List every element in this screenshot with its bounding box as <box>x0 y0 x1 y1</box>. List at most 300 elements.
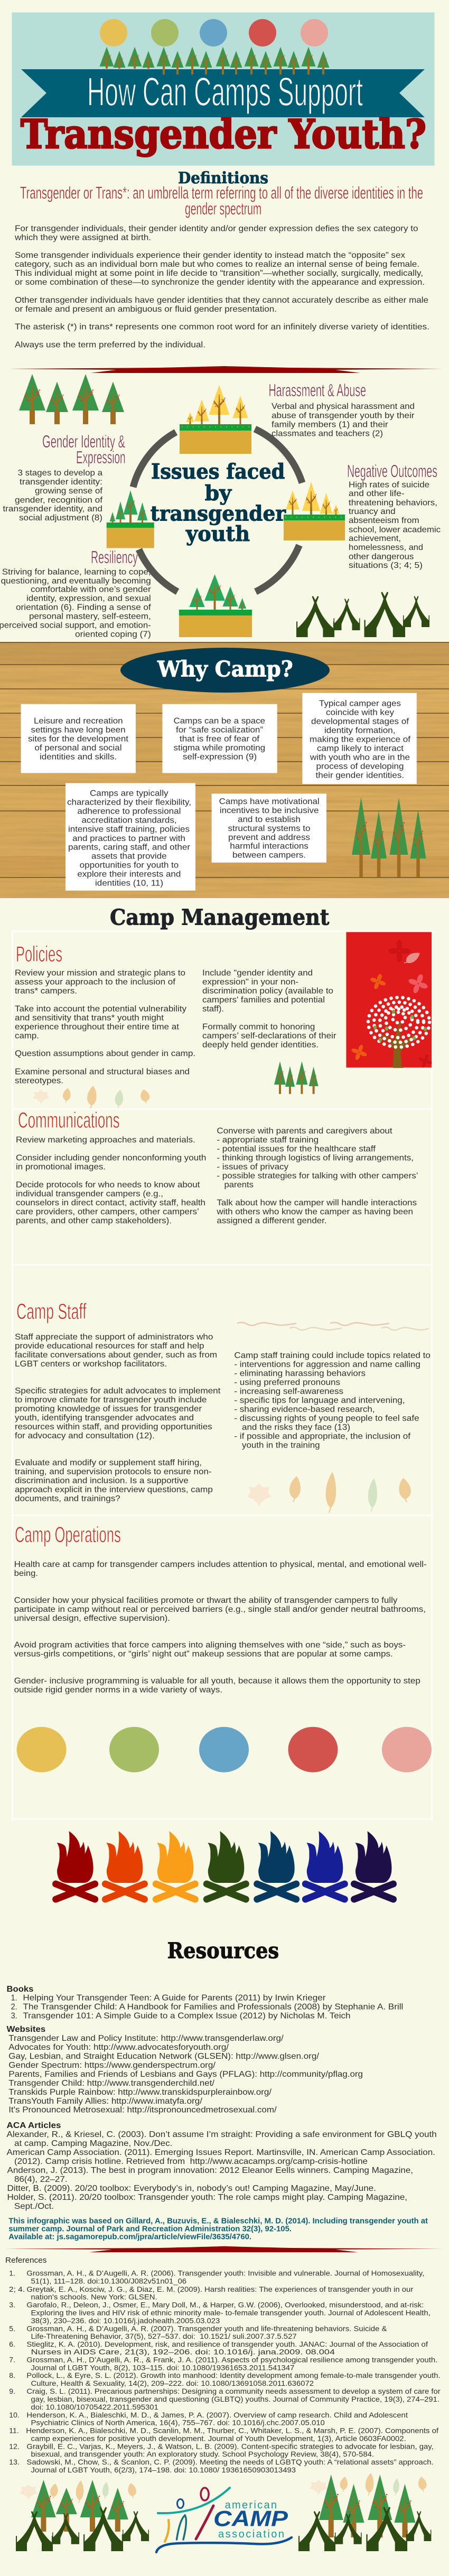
divider swoosh <box>5 2246 443 2252</box>
panel: references <box>5 2256 441 2474</box>
coloured circles <box>100 19 328 46</box>
reference list: Graybill, E. C., Varjas, K., Meyers, J., & Watson, L. B. (2009). Content-specific strategies to advocate for lesbian, gay, <box>26 2442 434 2450</box>
card: leisure and recreation: Leisure and recreation <box>34 716 123 725</box>
books list: 1. <box>11 1994 17 2003</box>
policies left column: camp. <box>15 1031 39 1040</box>
policies right column: staff). <box>202 1005 224 1014</box>
resiliency text: identity, expression, and sexual <box>26 594 151 603</box>
websites list: It's Pronounced Metrosexual: http://itspronouncedmetrosexual.com/ <box>8 2106 277 2115</box>
trees <box>319 2475 415 2537</box>
reference list: Garofalo, R., Deleon, J., Osmer, E., Mary Doll, M., & Harper, G.W. (2006), Overlooked, misunderstood, and at-risk: <box>26 2300 424 2309</box>
resiliency text: perceived social support, and emotion- <box>0 621 151 630</box>
camp operations text: Avoid program activities that force campers into aligning themselves with one “side,” such as boys- <box>14 1641 406 1650</box>
camp staff left column: Staff appreciate the support of administrators who <box>15 1333 213 1342</box>
card: safe socialization: stigma while promoting <box>173 743 265 752</box>
negative outcomes text: other dangerous <box>349 553 414 562</box>
negative outcomes text <box>349 481 441 570</box>
reference list: doi: 10.1080/10705422.2011.595301 <box>31 2403 158 2411</box>
communications right column: Talk about how the camper will handle interactions <box>217 1199 417 1208</box>
resiliency text: orientation (6). Finding a sense of <box>16 603 151 612</box>
negative outcomes text: absenteeism from <box>349 516 419 525</box>
card: camps are typically: intensive staff training, policies <box>68 825 190 834</box>
camp operations text: Consider how your physical facilities promote or thwart the ability of transgender campers to fully <box>14 1596 397 1605</box>
reference list: Henderson, K. A., Bialeschki, M. D., & James, P. A. (2007). Overview of camp research. Child and Adolescent <box>26 2411 408 2419</box>
communications left column: Decide protocols for who needs to know about <box>16 1181 200 1190</box>
camp staff left column: discrimination and inclusion. Is a supportive <box>15 1476 189 1485</box>
card: leisure and recreation: of personal and social <box>35 743 121 752</box>
websites list: Websites <box>6 2025 45 2034</box>
reference list: 38(3), 230–236. doi: 10.1016/j.jadohealth.2005.03.023 <box>31 2316 220 2325</box>
card: camps are typically: opportunities for youth to <box>80 861 179 870</box>
icon: tents <box>296 592 429 637</box>
communications right column: parents <box>224 1181 254 1190</box>
camp staff right column: - eliminating harassing behaviors <box>234 1369 366 1378</box>
reference list: Nurses in AIDS Care, 21(3), 192–206. doi: 10.1016/j. jana.2009. 08.004 <box>31 2348 335 2356</box>
policies right column: campers’ self-declarations of their <box>202 1031 336 1040</box>
top island with autumn trees <box>180 385 251 454</box>
header background <box>12 13 434 166</box>
communications left column: Review marketing approaches and materials. <box>16 1136 195 1145</box>
books list: 2. <box>11 2003 17 2012</box>
card: camps are typically: accreditation standards, <box>81 816 176 825</box>
harassment text <box>272 402 415 438</box>
card: leisure and recreation: identities and skills. <box>40 752 117 761</box>
websites list: Gay, Lesbian, and Straight Education Network (GLSEN): http://www.glsen.org/ <box>8 2052 320 2061</box>
harassment text: abuse of transgender youth by their <box>272 411 415 420</box>
card: typical camper ages: their gender identities. <box>316 771 404 780</box>
camp staff right column <box>234 1351 431 1450</box>
reference list: bisexual, and transgender youth: An exploratory study. School Psychology Review, 38(4), 570-584. <box>31 2450 374 2458</box>
policies right column: deeply held gender identities. <box>202 1040 319 1049</box>
heading: gender identity and expression: Gender Identity & <box>42 432 125 451</box>
transgender definition: gender spectrum <box>185 199 261 218</box>
reference list: Psychiatric Clinics of North America, 16(4), 755–767. doi: 10.1016/j.chc.2007.05.010 <box>31 2419 325 2427</box>
reference list: Grossman, A. H., D’Augelli, A. R., & Frank, J. A. (2011). Aspects of psychological resilience among transgender youth. <box>26 2356 437 2364</box>
ACA articles list: Alexander, R., & Kriesel, C. (2003). Don’t assume I’m straight: Providing a safe environment for GBLQ youth <box>6 2130 437 2139</box>
source note: This infographic was based on Gillard, A., Buzuvis, E., & Bialeschki, M. D. (2014). Including transgender youth at <box>8 2216 428 2225</box>
camp management frame <box>11 931 434 1822</box>
communications left column: individual transgender campers (e.g., <box>16 1190 163 1199</box>
communications right column <box>216 1127 418 1226</box>
panel: resources <box>6 1938 437 2241</box>
camp staff left column: to improve climate for transgender youth include <box>15 1395 207 1404</box>
camp staff right column: and the risks they face (13) <box>242 1423 350 1432</box>
ACA articles list: Sept./Oct. <box>14 2202 54 2211</box>
negative outcomes text: homelessness, and <box>349 543 423 552</box>
card: leisure and recreation: sites for the development <box>28 734 129 743</box>
leaves <box>309 2473 427 2496</box>
reference list: gay, lesbian, bisexual, transgender and questioning (GLBTQ) youths. Journal of Community Practice, 19(3), 274–291. <box>31 2395 439 2403</box>
camp staff left column <box>15 1333 221 1503</box>
heading: camp operations: Camp Operations <box>15 1522 121 1547</box>
camp staff right column: - using preferred pronouns <box>234 1378 340 1387</box>
negative outcomes text: situations (3; 4; 5) <box>349 561 423 570</box>
camp staff left column: Evaluate and modify or supplement staff hiring, <box>15 1458 202 1467</box>
heading: camp management: Camp Management <box>110 905 329 930</box>
camp staff left column: documents, and trainings? <box>15 1494 120 1503</box>
websites list: Transkids Purple Rainbow: http://www.transkidspurplerainbow.org/ <box>8 2088 272 2097</box>
heading: resiliency: Resiliency <box>91 547 138 567</box>
left island with green trees <box>107 490 154 548</box>
websites list: Parents, Families and Friends of Lesbians and Gays (PFLAG): http://community/pflag.org <box>8 2070 363 2079</box>
policies left column: Review your mission and strategic plans to <box>15 969 185 978</box>
reference list: 5. <box>9 2324 15 2332</box>
reference list: Exploring the lives and HIV risk of ethnic minority male- to-female transgender youth. Journal of Adolescent Health, <box>31 2308 431 2317</box>
ACA articles list: Holder, S. (2011). 20/20 toolbox: Transgender youth: The role camps might play. Camping Magazine, <box>7 2193 407 2202</box>
logo: american camp association <box>156 2488 292 2552</box>
websites list: Advocates for Youth: http://www.advocatesforyouth.org/ <box>8 2043 229 2052</box>
policies left column: assess your approach to the inclusion of <box>15 978 176 987</box>
card: typical camper ages: identity formation, <box>324 726 395 735</box>
reference list: Sadowski, M., Chow, S., & Scanlon, C. P. (2009). Meeting the needs of LGBTQ youth: A “relational assets” approach. <box>26 2458 434 2466</box>
heading: references: References <box>5 2256 46 2265</box>
camp staff left column: for advocacy and consultation (12). <box>15 1431 155 1440</box>
policies left column: Examine personal and structural biases and <box>15 1067 190 1076</box>
communications left column: Consider including gender nonconforming youth <box>16 1154 206 1163</box>
divider swoosh <box>8 366 443 373</box>
ribbon shape <box>21 69 425 117</box>
policies left column: stereotypes. <box>15 1076 63 1085</box>
centre heading: issues faced by transgender youth: Issues faced <box>151 460 285 484</box>
definitions body text: Some transgender individuals experience their gender identity to instead match the “opposite” sex <box>15 251 405 260</box>
harassment text: Verbal and physical harassment and <box>272 402 415 411</box>
panel: definitions <box>14 169 429 350</box>
card: motivational incentives: structural systems to <box>228 824 311 833</box>
logo text camp: CAMP <box>213 2506 288 2531</box>
ACA articles list: (2012). Camp crisis hotline. Retrieved from http://www.acacamps.org/camp-crisis-hotline <box>14 2157 368 2166</box>
row of pine trees <box>99 47 330 68</box>
books list: Helping Your Transgender Teen: A Guide for Parents (2011) by Irwin Krieger <box>23 1994 326 2003</box>
gender identity text <box>3 469 103 522</box>
camp staff right column: - discussing rights of young people to feel safe <box>234 1414 419 1423</box>
heading: resources: Resources <box>167 1938 279 1964</box>
tents <box>16 2507 149 2551</box>
policies left column: and sensitivity that trans* youth might <box>15 1014 164 1023</box>
camp operations text: participate in camp without real or perceived barriers (e.g., single stall and/or gender neutral bathrooms, <box>14 1605 426 1614</box>
policies left column: trans* campers. <box>15 987 77 996</box>
camp operations text: universal design, effective supervision). <box>14 1614 170 1623</box>
books list: The Transgender Child: A Handbook for Families and Professionals (2008) by Stephanie A. Brill <box>23 2003 403 2012</box>
books list: Transgender 101: A Simple Guide to a Complex Issue (2012) by Nicholas M. Teich <box>23 2012 350 2021</box>
reference list: Stieglitz, K. A. (2010). Development, risk, and resilience of transgender youth. JANAC: Journal of the Association of <box>26 2340 428 2348</box>
right island with autumn trees <box>284 482 345 540</box>
illustration: red panel with white tree <box>346 932 434 1070</box>
camp staff left column: resources within staff, and providing opportunities <box>15 1422 212 1431</box>
camp staff right column: youth in the training <box>242 1441 320 1450</box>
harassment text: classmates and teachers (2) <box>272 430 383 438</box>
communications left column: parents, and other camp stakeholders). <box>16 1217 172 1226</box>
negative outcomes text: and other life- <box>349 489 405 498</box>
reference list: Journal of LGBT Youth, 6(2/3), 174–198. doi: 10.1080/ 19361650903013493 <box>31 2466 296 2474</box>
ACA articles list: American Camp Association. (2011). Emerging Issues Report. Martinsville, IN. American Camp Association. <box>6 2148 435 2157</box>
websites list <box>6 2025 363 2115</box>
negative outcomes text: school, lower academic <box>349 525 441 535</box>
definitions body text: Other transgender individuals have gender identities that they cannot accurately describe as either male <box>15 296 428 305</box>
heading: camp staff: Camp Staff <box>16 1299 87 1324</box>
camp staff right column: - if possible and appropriate, the inclusion of <box>234 1432 411 1441</box>
reference list: Life-Threatening Behavior, 37(5), 527–537. doi: 10.1521/ suli.2007.37.5.527 <box>31 2332 297 2340</box>
policies right column: Include "gender identity and <box>202 969 313 978</box>
footer scene: right trees and tents <box>298 2473 431 2551</box>
icon: row of leaves <box>33 1086 149 1108</box>
wood background <box>0 642 449 898</box>
definitions body text: The asterisk (*) in trans* represents one common root word for an infinitely diverse variety of identities. <box>15 323 429 332</box>
heading ellipse <box>120 648 330 693</box>
books list: 3. <box>11 2012 17 2021</box>
tree trunks over ribbon <box>106 62 324 74</box>
centre heading: issues faced by transgender youth: youth <box>185 522 250 546</box>
communications left column: in promotional images. <box>16 1163 106 1172</box>
communications right column: - possible strategies for talking with other campers’ <box>217 1172 418 1181</box>
card: camps are typically: parents, caring staff, and other <box>68 843 191 852</box>
transgender definition <box>20 183 423 218</box>
reference list: 11. <box>9 2426 19 2435</box>
decorative squiggles <box>237 1322 429 1330</box>
panel: camp operations <box>14 1522 432 1772</box>
heading: gender identity and expression: Expression <box>76 447 126 467</box>
negative outcomes text: threatening behaviors, <box>349 498 437 507</box>
definitions body text: For transgender individuals, their gender identity and/or gender expression defies the sex category to <box>15 224 418 234</box>
policies right column <box>202 969 336 1049</box>
source note: Available at: js.sagamorepub.com/jpra/article/viewFile/3635/4760. <box>8 2232 251 2241</box>
harassment text: family members (1) and their <box>272 421 388 429</box>
reference list: 12. <box>9 2442 20 2450</box>
card: typical camper ages: developmental stages of <box>311 717 409 726</box>
definitions body text <box>14 224 429 350</box>
icon: row of campfires <box>56 1831 394 1899</box>
card: camps are typically: characterized by their flexibility, <box>67 798 191 807</box>
websites list: Transgender Law and Policy Institute: http://www.transgenderlaw.org/ <box>8 2034 284 2043</box>
icon: four pine trees <box>19 374 124 424</box>
communications right column: assigned a different gender. <box>217 1217 326 1226</box>
centre heading: issues faced by transgender youth <box>151 460 286 546</box>
reference list: 3. <box>9 2300 15 2309</box>
definitions body text: or female and present an ambiguous or fluid gender presentation. <box>15 305 277 314</box>
icon: trees on wood <box>352 797 426 877</box>
logo figures <box>156 2488 292 2552</box>
resiliency text: personal mastery, self-esteem, <box>29 612 151 621</box>
card: motivational incentives: between campers. <box>232 851 306 860</box>
reference list: Pollock, L., & Eyre, S. L. (2012). Growth into manhood: Identity development among female-to-male transgender youth. <box>26 2371 441 2379</box>
ACA articles list: Ditter, B. (2009). 20/20 toolbox: Everybody’s in, nobody’s out! Camping Magazine, May/June. <box>7 2184 376 2193</box>
footer scene: left trees and tents <box>16 2480 149 2551</box>
negative outcomes text: achievement, <box>349 534 401 543</box>
communications right column: - potential issues for the healthcare staff <box>217 1145 376 1154</box>
reference list: 10. <box>9 2411 20 2419</box>
ACA articles list: 86(4), 22–27. <box>14 2175 67 2184</box>
websites list: TransYouth Family Allies: http://www.imatyfa.org/ <box>8 2097 203 2106</box>
camp staff left column: Specific strategies for adult advocates to implement <box>15 1386 221 1395</box>
reference list: 9. <box>9 2387 15 2395</box>
card: typical camper ages: Typical camper ages <box>319 699 401 708</box>
camp operations text: outside rigid gender norms in a wide variety of ways. <box>14 1686 222 1695</box>
heading: definitions: Definitions <box>178 169 268 188</box>
camp staff left column: youth, identifying transgender advocates and <box>15 1413 194 1422</box>
communications right column: with others who know the camper as having been <box>216 1208 413 1217</box>
ACA articles list: Anderson, J. (2013). The best in program innovation: 2012 Eleanor Eells winners. Camping Magazine, <box>7 2166 413 2175</box>
definitions body text: or some combination of these—to synchronize the gender identity with the appearance and expression. <box>15 278 425 287</box>
card: camps are typically <box>66 783 195 891</box>
camp staff right column: - increasing self-awareness <box>234 1387 343 1396</box>
camp staff left column: approach explicit in the interview questions, camp <box>15 1485 213 1494</box>
definitions body text: category, such as an individual born male but who comes to realize an internal sense of being female. <box>15 260 419 269</box>
card: motivational incentives: prevent and address <box>228 833 310 842</box>
resiliency text: Striving for balance, learning to cope, <box>2 567 151 577</box>
policies left column: Question assumptions about gender in camp. <box>15 1049 195 1058</box>
reference list: nation's schools. New York: GLSEN. <box>31 2293 157 2301</box>
camp staff right column: Camp staff training could include topics related to <box>234 1351 431 1360</box>
card: typical camper ages <box>302 693 417 784</box>
panel: issues faced by transgender youth <box>0 374 441 639</box>
camp operations text: versus-girls competitions, or “girls’ night out” makeup sessions that are popular at some camps. <box>14 1650 393 1659</box>
gender identity text: 3 stages to develop a <box>18 469 102 478</box>
bottom island with green trees <box>179 574 252 637</box>
card: safe socialization <box>162 704 277 773</box>
card: typical camper ages: camp likely to interact <box>317 744 404 753</box>
gender identity text: gender, recognition of <box>15 496 103 505</box>
communications right column: Converse with parents and caregivers about <box>217 1127 392 1136</box>
card: camps are typically: identities (10, 11) <box>95 879 163 888</box>
reference list: Grossman, A. H., & D’Augelli, A. R. (2006). Transgender youth: Invisible and vulnerable. Journal of Homosexuality, <box>26 2269 424 2278</box>
card: camps are typically: Camps are typically <box>90 789 168 798</box>
card: safe socialization: for “safe socialization” <box>176 725 263 734</box>
books list: Books <box>6 1985 33 1994</box>
policies right column: campers' families and potential <box>202 996 325 1005</box>
resiliency text: oriented coping (7) <box>75 630 151 639</box>
reference list: Journal of LGBT Youth, 8(2), 103–115. doi: 10.1080/19361653.2011.541347 <box>31 2364 295 2372</box>
leaves <box>19 2480 136 2503</box>
reference list: camp experiences for positive youth development. Journal of Youth Development, 1(3), Article 0603FA0002. <box>31 2434 406 2442</box>
panel: header <box>12 13 434 166</box>
communications right column: - issues of privacy <box>217 1163 288 1172</box>
resiliency text: comfortable with one’s gender <box>31 585 151 594</box>
reference list: 13. <box>9 2458 20 2466</box>
gender identity text: transgender identity: <box>20 478 102 487</box>
policies right column: discrimination policy (available to <box>202 987 333 996</box>
communications right column: - appropriate staff training <box>217 1136 319 1145</box>
reference list: 8. <box>9 2371 15 2379</box>
definitions body text: Always use the term preferred by the individual. <box>15 340 205 350</box>
card: typical camper ages: making the experience of <box>310 735 411 744</box>
resiliency text: questioning, and eventually becoming <box>1 577 151 586</box>
negative outcomes text: High rates of suicide <box>349 481 429 489</box>
heading: harassment and abuse: Harassment & Abuse <box>268 380 366 400</box>
card: leisure and recreation <box>21 704 136 773</box>
card: camps are typically: and practices to partner with <box>72 834 185 843</box>
camp operations text <box>14 1560 427 1695</box>
books list <box>6 1985 403 2021</box>
reference list: 1. <box>9 2269 15 2278</box>
card: typical camper ages: with youth who are in the <box>310 753 410 762</box>
heading: communications: Communications <box>18 1107 120 1132</box>
coloured circles <box>17 1727 432 1772</box>
definitions body text: which they were assigned at birth. <box>14 234 151 242</box>
card: camps are typically: assets that provide <box>91 852 167 861</box>
camp staff left column: promoting knowledge of issues for transgender <box>15 1404 202 1413</box>
definitions body text: This individual might at some point in life decide to “transition”—whether socially, surgically, medically, <box>15 269 423 278</box>
card: safe socialization: self-expression (9) <box>183 752 257 761</box>
heading: gender identity and expression <box>42 432 126 467</box>
reference list: Craig, S. L. (2011). Precarious partnerships: Designing a community needs assessment to develop a system of care for <box>26 2387 441 2395</box>
card: safe socialization: that is free of fear of <box>180 734 260 743</box>
reference list: 6. <box>9 2340 15 2348</box>
camp operations text: being. <box>14 1569 38 1578</box>
card: safe socialization: Camps can be a space <box>173 716 265 725</box>
ACA articles list: ACA Articles <box>6 2121 61 2130</box>
reference list: 2; 4. <box>9 2285 25 2293</box>
card: camps are typically: explore their interests and <box>77 870 181 879</box>
panel: communications <box>16 1107 418 1226</box>
centre heading: issues faced by transgender youth: transgender <box>151 502 286 526</box>
card: camps are typically: adherence to professional <box>77 807 181 816</box>
source note <box>8 2216 428 2241</box>
camp staff left column: LGBT centers or workshop facilitators. <box>15 1360 167 1369</box>
tents <box>298 2507 431 2551</box>
logo text american: american <box>225 2499 277 2511</box>
communications right column: - thinking through logistics of living arrangements, <box>217 1154 414 1163</box>
card: motivational incentives: incentives to be inclusive <box>220 806 319 815</box>
icon: large leaves <box>247 1472 411 1513</box>
resiliency text <box>0 567 151 639</box>
communications left column: counselors in direct contact, activity staff, health <box>16 1199 205 1208</box>
icon: small pine trees <box>274 1061 319 1094</box>
panel: policies <box>15 932 434 1108</box>
communications left column <box>16 1136 206 1226</box>
ring <box>133 429 302 592</box>
websites list: Transgender Child: http://www.transgenderchild.net/ <box>8 2079 215 2088</box>
reference list: Culture, Health & Sexuality, 14(2), 209–222. doi: 10.1080/13691058.2011.636072 <box>31 2379 314 2387</box>
card: typical camper ages: coincide with key <box>326 708 394 717</box>
reference list: 7. <box>9 2356 15 2364</box>
ACA articles list <box>6 2121 437 2211</box>
camp staff left column: training, and supervision protocols to ensure non- <box>15 1467 212 1476</box>
camp operations text: Gender- inclusive programming is valuable for all youth, because it allows them the opportunity to step <box>14 1677 420 1686</box>
card: motivational incentives: Camps have motivational <box>219 797 320 806</box>
policies right column: Formally commit to honoring <box>202 1022 315 1031</box>
policies left column <box>15 969 195 1085</box>
gender identity text: social adjustment (8) <box>19 514 102 522</box>
heading: policies: Policies <box>16 941 62 966</box>
logo text association: association <box>218 2528 284 2540</box>
camp staff left column: provide educational resources for staff and help <box>15 1342 204 1351</box>
card: motivational incentives <box>212 794 326 863</box>
card: leisure and recreation: settings have long been <box>31 725 126 734</box>
centre heading: issues faced by transgender youth: by <box>205 481 232 506</box>
camp staff right column: - specific tips for language and intervening, <box>234 1396 405 1405</box>
reference list: 51(1), 111–128. doi:10.1300/J082v51n01_06 <box>31 2277 186 2285</box>
ACA articles list: at camp. Camping Magazine, Nov./Dec. <box>14 2139 172 2148</box>
reference list: Henderson, K. A., Bialeschki, M. D., Scanlin, M. M., Thurber, C., Whitaker, L. S., & Marsh, P. E. (2007). Components of <box>26 2426 438 2435</box>
panel: why camp <box>0 642 449 898</box>
card: typical camper ages: process of developing <box>316 762 404 771</box>
policies right column: expression" in your non- <box>202 978 298 987</box>
panel: camp staff <box>15 1299 431 1513</box>
websites list: Gender Spectrum: https://www.genderspectrum.org/ <box>8 2061 216 2070</box>
policies left column: Take into account the potential vulnerability <box>15 1004 186 1013</box>
reference list: Grossman, A. H., & D’Augelli, A. R. (2007). Transgender youth and life-threatening behaviors. Suicide & <box>26 2324 387 2332</box>
camp operations text: Health care at camp for transgender campers includes attention to physical, mental, and emotional well- <box>14 1560 427 1569</box>
reference list: Greytak, E. A., Kosciw, J. G., & Diaz, E. M. (2009). Harsh realities: The experiences of transgender youth in our <box>26 2285 414 2293</box>
negative outcomes text: truancy and <box>349 507 396 516</box>
card: motivational incentives: harmful interactions <box>230 842 308 851</box>
camp staff right column: - interventions for aggression and name calling <box>234 1360 420 1369</box>
source note: summer camp. Journal of Park and Recreation Administration 32(3), 92-105. <box>8 2224 292 2233</box>
policies left column: experience throughout their entire time at <box>15 1022 180 1031</box>
trees <box>31 2480 128 2532</box>
heading: why camp: Why Camp? <box>157 657 293 682</box>
gender identity text: transgender identity, and <box>3 505 102 514</box>
communications left column: care providers, other campers, other campers’ <box>16 1208 199 1217</box>
